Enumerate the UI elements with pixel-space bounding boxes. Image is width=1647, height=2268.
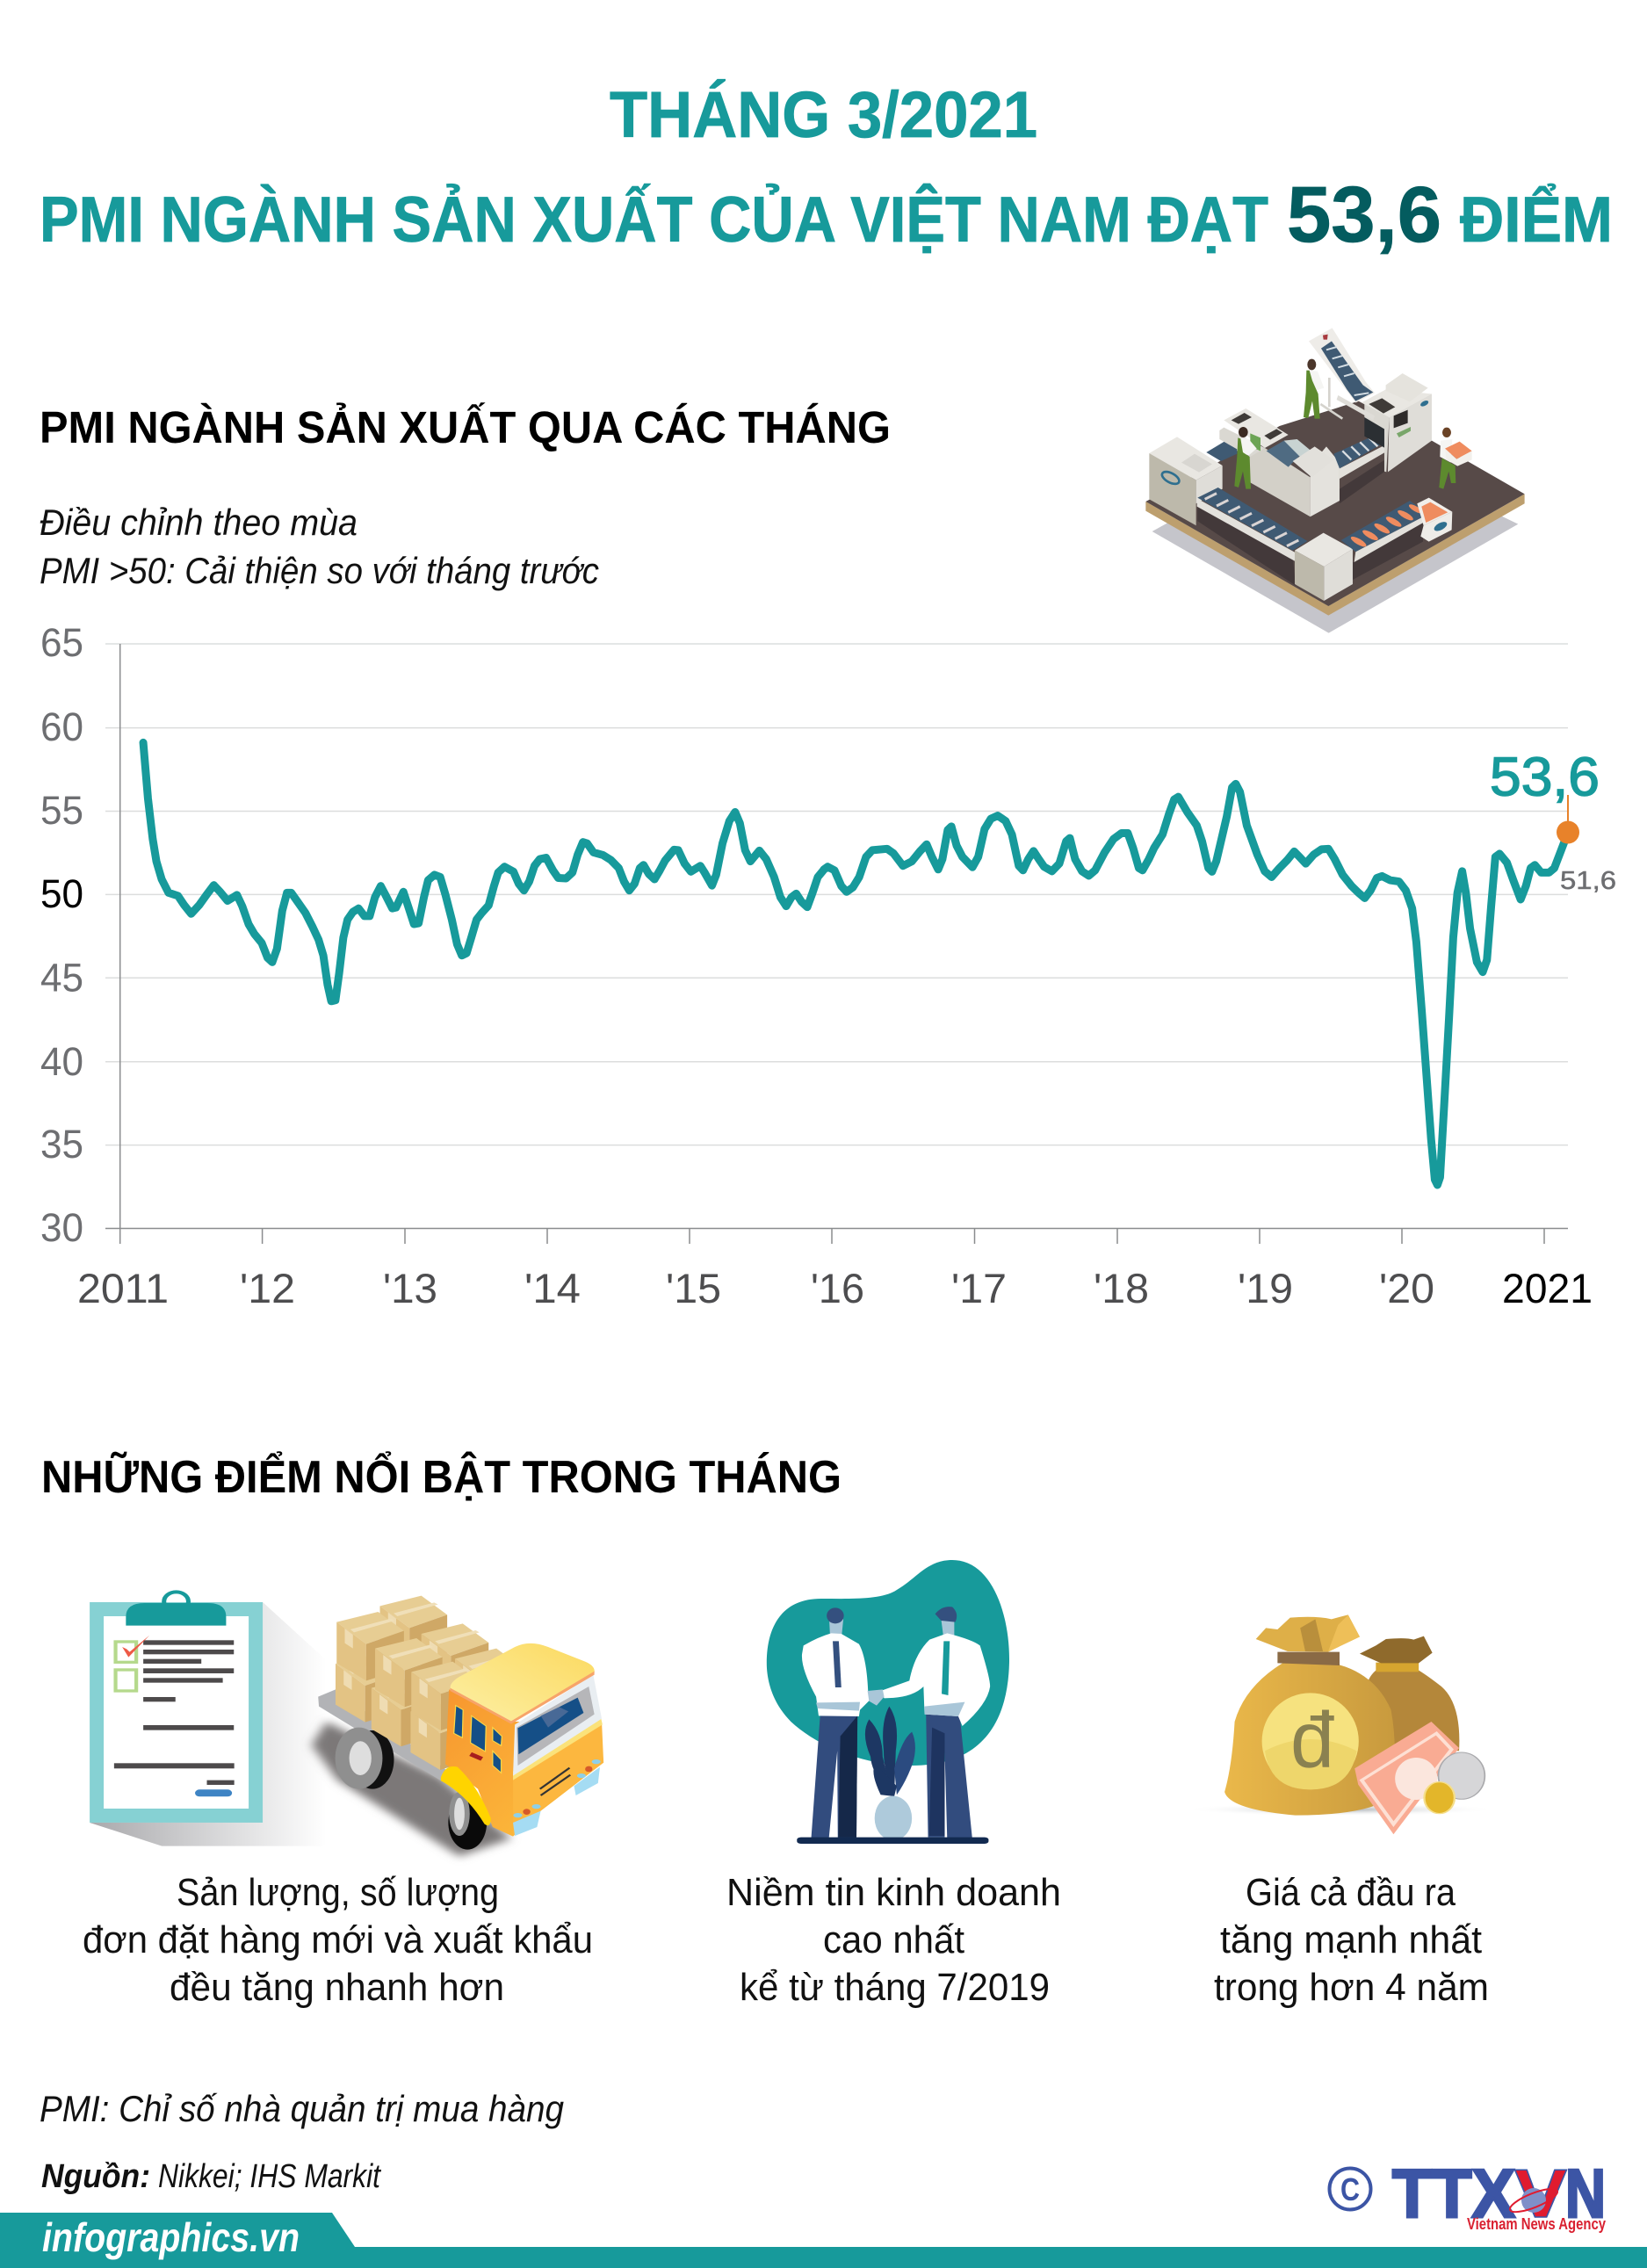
highlighted latest value: 51,6 xyxy=(1560,867,1616,895)
left man xyxy=(811,1715,857,1840)
big bag xyxy=(1224,1663,1395,1816)
axes xyxy=(105,644,1568,1244)
crate xyxy=(1417,498,1452,525)
heading: PMI qua các tháng: PMI NGÀNH SẢN XUẤT QUA CÁC THÁNG xyxy=(40,401,891,452)
right conveyor xyxy=(1341,501,1429,552)
title line 2: PMI NGÀNH SẢN XUẤT CỦA VIỆT NAM ĐẠT xyxy=(40,184,1268,256)
chart notes: Điều chỉnh theo mùa xyxy=(40,502,358,543)
y axis labels: 50 xyxy=(40,871,83,916)
left machine xyxy=(1149,437,1223,480)
coins xyxy=(1439,1752,1484,1799)
x axis labels: '13 xyxy=(383,1265,437,1311)
x axis labels xyxy=(77,1265,1593,1311)
right machine xyxy=(1362,389,1432,417)
worker 1 xyxy=(1304,359,1324,419)
logo: TTXVN xyxy=(1330,2155,1606,2233)
title line 1: THÁNG 3/2021 xyxy=(610,78,1037,151)
chart notes xyxy=(40,502,599,591)
logo: TTXVN: TTX xyxy=(1392,2155,1515,2232)
worker 3 xyxy=(1439,428,1472,489)
source: Nguồn: xyxy=(41,2158,150,2195)
PMI line xyxy=(143,742,1568,1185)
y axis labels: 55 xyxy=(40,788,83,833)
y axis labels: 35 xyxy=(40,1122,83,1167)
source xyxy=(41,2158,381,2195)
title line 2: 53,6 xyxy=(1287,171,1441,259)
truck xyxy=(312,1596,603,1856)
x axis labels: 2021 xyxy=(1502,1265,1593,1311)
icon: money bags xyxy=(1184,1614,1497,1834)
x axis labels: '16 xyxy=(811,1265,864,1311)
title xyxy=(40,78,1613,259)
x axis labels: '14 xyxy=(524,1265,581,1311)
caption: tăng mạnh nhất xyxy=(1220,1918,1482,1961)
y axis labels: 65 xyxy=(40,620,83,665)
y axis labels: 45 xyxy=(40,956,83,1000)
footer band xyxy=(0,2213,1647,2268)
x axis labels: '18 xyxy=(1094,1265,1149,1311)
upper-left conveyor xyxy=(1206,439,1237,461)
footer band: infographics.vn xyxy=(42,2214,300,2260)
caption xyxy=(83,1871,593,2009)
bills xyxy=(1354,1722,1459,1834)
worker 2 xyxy=(1234,427,1257,489)
front block xyxy=(1295,533,1353,567)
x axis labels: '12 xyxy=(240,1265,295,1311)
caption: Giá cả đầu ra xyxy=(1246,1871,1456,1914)
clipboard xyxy=(90,1592,326,1846)
y axis labels: 40 xyxy=(40,1039,83,1084)
caption: đều tăng nhanh hơn xyxy=(170,1966,504,2009)
caption: cao nhất xyxy=(823,1918,964,1961)
logo: TTXVN: V xyxy=(1514,2155,1567,2232)
icon: factory illustration xyxy=(1145,328,1525,633)
icon: handshake xyxy=(767,1560,1009,1844)
caption: trong hơn 4 năm xyxy=(1214,1966,1489,2009)
logo: TTXVN: Vietnam News Agency xyxy=(1467,2215,1606,2233)
logo: TTXVN: N xyxy=(1565,2155,1606,2232)
line chart: PMI 2011-2021 xyxy=(40,620,1616,1311)
caption: đơn đặt hàng mới và xuất khẩu xyxy=(83,1918,593,1961)
note: PMI definition: PMI: Chỉ số nhà quản trị mua hàng xyxy=(40,2088,564,2129)
middle conveyor xyxy=(1333,433,1385,468)
panel: niềm tin kinh doanh xyxy=(726,1560,1061,2009)
logo: TTXVN: C xyxy=(1340,2171,1360,2207)
icon: money bags: đ xyxy=(1290,1697,1334,1785)
caption: Niềm tin kinh doanh xyxy=(726,1871,1061,1914)
highlighted latest value: 53,6 xyxy=(1490,748,1600,808)
y axis labels xyxy=(40,620,83,1250)
caption xyxy=(726,1871,1061,2009)
plant and vase xyxy=(865,1707,915,1796)
right man xyxy=(926,1715,972,1840)
title line 2 xyxy=(40,171,1613,259)
inclined conveyor xyxy=(1320,404,1342,419)
y axis labels: 30 xyxy=(40,1205,83,1250)
x axis labels: '17 xyxy=(951,1265,1007,1311)
highlighted latest value xyxy=(1490,748,1616,895)
heading: những điểm nổi bật: NHỮNG ĐIỂM NỔI BẬT TRONG THÁNG xyxy=(41,1451,842,1503)
title line 2: ĐIỂM xyxy=(1460,184,1613,256)
x axis labels: '19 xyxy=(1238,1265,1293,1311)
x axis labels: '20 xyxy=(1379,1265,1434,1311)
caption xyxy=(1214,1871,1489,2009)
x axis labels: '15 xyxy=(666,1265,721,1311)
x axis labels: 2011 xyxy=(77,1265,169,1311)
caption: kể từ tháng 7/2019 xyxy=(740,1966,1050,2009)
long conveyor xyxy=(1197,488,1307,551)
icon: clipboard and truck xyxy=(90,1592,603,1856)
panel: giá cả đầu ra xyxy=(1184,1614,1497,2009)
chart notes: PMI >50: Cải thiện so với tháng trước xyxy=(40,550,599,591)
panel: sản lượng xyxy=(83,1592,603,2009)
source: Nikkei; IHS Markit xyxy=(158,2158,381,2195)
centre machine xyxy=(1224,408,1289,448)
caption: Sản lượng, số lượng xyxy=(177,1871,499,1914)
small bag xyxy=(1367,1671,1459,1751)
grid lines xyxy=(105,644,1568,1145)
y axis labels: 60 xyxy=(40,704,83,749)
